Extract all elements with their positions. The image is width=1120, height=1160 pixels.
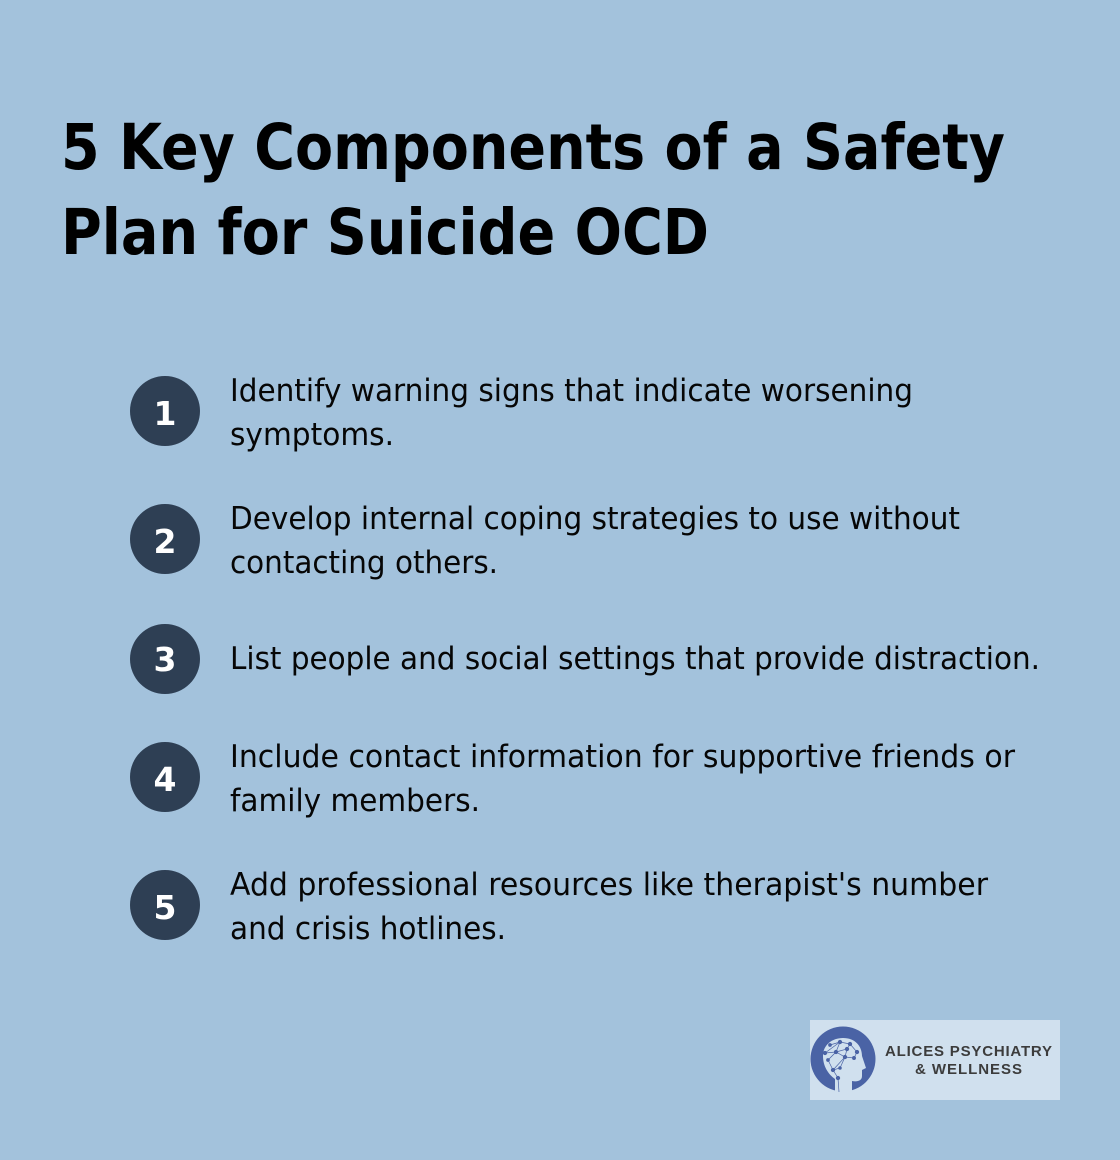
item 1 text: Identify warning signs that indicate worsening — [230, 373, 913, 409]
item 4 text — [230, 739, 1015, 819]
item 5 text — [230, 867, 988, 947]
logo wordmark: & WELLNESS — [915, 1061, 1022, 1078]
list item 4 — [130, 739, 1015, 819]
item 5 text: and crisis hotlines. — [230, 911, 506, 947]
logo wordmark — [885, 1043, 1052, 1078]
title: Plan for Suicide OCD — [61, 196, 709, 269]
item 5 text: Add professional resources like therapist's number — [230, 867, 988, 903]
number badge 5 — [130, 870, 200, 940]
title — [61, 111, 1005, 269]
number badge 1: 1 — [154, 394, 176, 433]
list item 3 — [130, 624, 1040, 694]
number badge 4 — [130, 742, 200, 812]
item 1 text — [230, 373, 913, 453]
icon: head with brain network — [810, 1026, 876, 1092]
item 2 text: contacting others. — [230, 545, 498, 581]
number badge 1 — [130, 376, 200, 446]
title: 5 Key Components of a Safety — [61, 111, 1005, 184]
number badge 4: 4 — [154, 760, 176, 799]
item 2 text: Develop internal coping strategies to use without — [230, 501, 960, 537]
list item 2 — [130, 501, 960, 581]
item 1 text: symptoms. — [230, 417, 394, 453]
item 4 text: family members. — [230, 783, 480, 819]
number badge 2: 2 — [154, 522, 176, 561]
number badge 2 — [130, 504, 200, 574]
list item 5 — [130, 867, 988, 947]
item 3 text: List people and social settings that provide distraction. — [230, 641, 1040, 677]
item 2 text — [230, 501, 960, 581]
list item 1 — [130, 373, 913, 453]
logo — [810, 1020, 1060, 1100]
logo wordmark: ALICES PSYCHIATRY — [885, 1043, 1052, 1060]
number badge 3 — [130, 624, 200, 694]
number badge 5: 5 — [154, 888, 176, 927]
item 4 text: Include contact information for supportive friends or — [230, 739, 1015, 775]
number badge 3: 3 — [154, 640, 176, 679]
